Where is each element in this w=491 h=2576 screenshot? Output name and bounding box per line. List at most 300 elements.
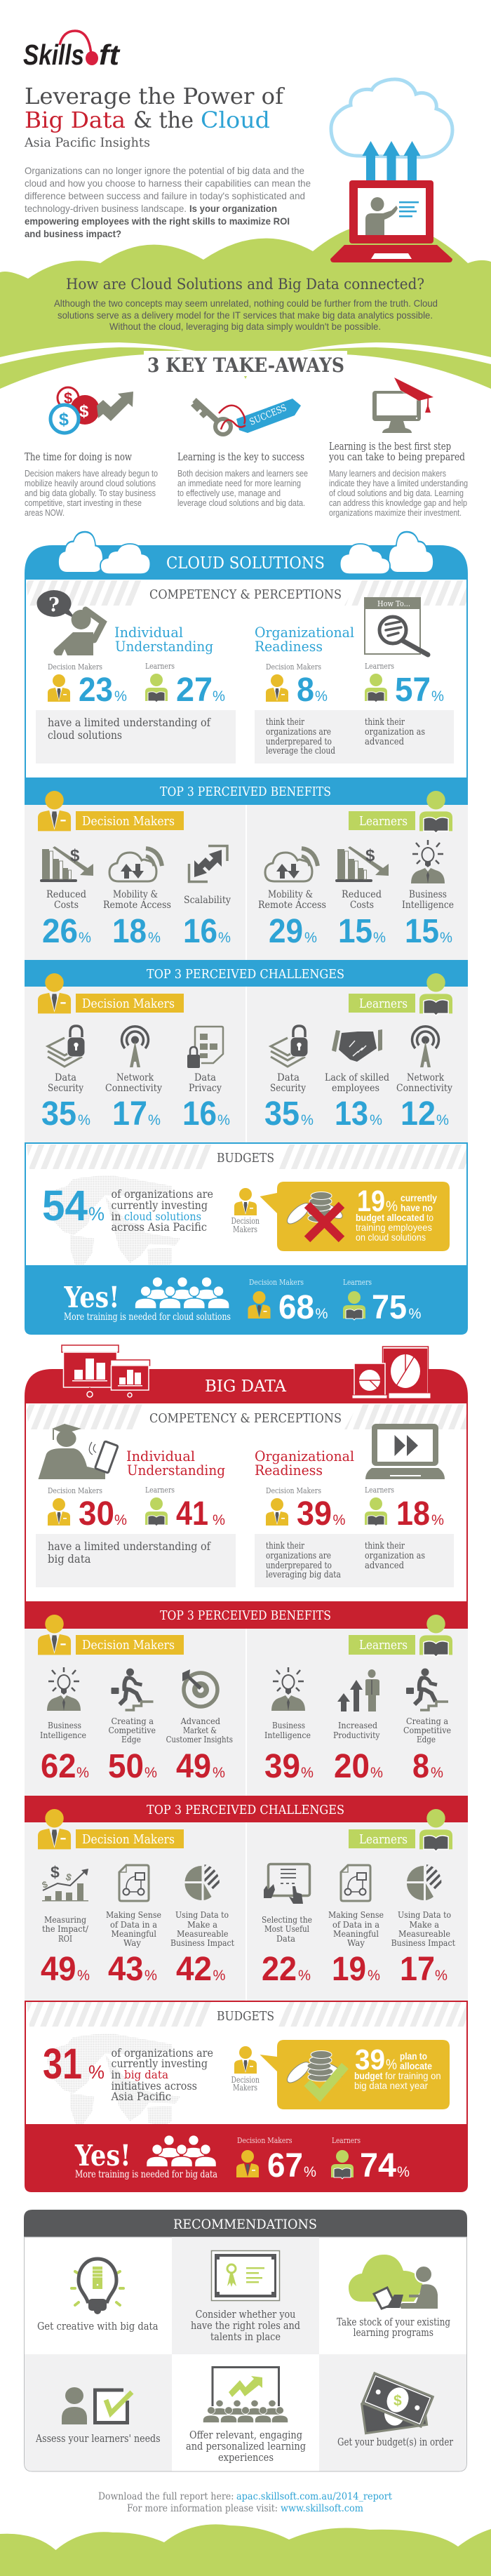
tag: learners [349, 973, 452, 1015]
title: Big Data [25, 107, 126, 133]
competency heading: COMPETENCY & PERCEPTIONS [149, 1411, 342, 1426]
stat: 31% investing: currently investing [111, 2057, 208, 2070]
stat: learners 41%: 41 [176, 1495, 208, 1533]
stat: 54% investing [42, 1182, 213, 1234]
takeaway 3: Many learners and decision makers [329, 469, 446, 479]
rec: personalized learning: and personalized learning [186, 2441, 306, 2452]
callout: organizational readiness: advanced [365, 737, 404, 747]
benefit: reduced costs 26% [40, 846, 93, 950]
callout: 19% no budget: % [386, 1199, 398, 1215]
intro text: empowering employees with the right skills to maximize ROI [25, 215, 290, 227]
section: cloud solutions [25, 532, 468, 1335]
stat: learners 75%: Learners [343, 1277, 372, 1287]
heading: organizational readiness [255, 1448, 354, 1479]
rec: existing programs: Take stock of your existing [337, 2317, 450, 2328]
stat: learners 75%: 75 [372, 1289, 407, 1326]
challenge: data security 35%: % [301, 1112, 314, 1128]
rec: get creative: Get creative with big data [37, 2321, 159, 2333]
rec: roles and talents [191, 2251, 300, 2343]
benefit: reduced costs 15%: 15 [338, 913, 372, 950]
heading: individual understanding: Individual [126, 1448, 195, 1464]
panel: budgets big data [25, 2001, 467, 2125]
icon: decision maker: Makers [233, 1224, 257, 1234]
panel: challenges [25, 1809, 468, 2001]
challenge: making sense of data 43% [106, 1865, 161, 1988]
title: Leverage the Power of [25, 83, 285, 109]
callout: 19% no budget: currently [401, 1192, 437, 1203]
challenge: data security 35%: Security [48, 1083, 83, 1094]
stat: decision makers 39%: % [332, 1512, 345, 1528]
heading: 3 key take-aways: 3 KEY TAKE-AWAYS [147, 354, 344, 377]
stat: decision makers 8%: Decision Makers [266, 662, 321, 672]
challenge: making sense of data 19%: 19 [332, 1951, 366, 1988]
takeaway 1: The time for doing is now [25, 452, 132, 463]
callout: 19% no budget: have no [401, 1202, 433, 1213]
benefit: competitive edge 50% [108, 1669, 157, 1785]
benefit: mobility 29%: 29 [269, 913, 303, 950]
icon: confused person [36, 590, 103, 655]
benefit: reduced costs 15%: Costs [350, 900, 374, 911]
challenge: network 12% [396, 1027, 452, 1133]
connected paragraph: Without the cloud, leveraging big data simply wouldn't be possible. [109, 321, 381, 332]
benefit: reduced costs 26%: % [79, 930, 91, 946]
challenge: selecting data 22%: Most Useful [264, 1923, 309, 1934]
section: big data [25, 1345, 468, 2192]
benefit: competitive edge 50%: Creating a [111, 1716, 154, 1726]
challenge: data privacy 16%: Privacy [189, 1083, 222, 1094]
benefit: business intelligence 39% [264, 1667, 314, 1785]
stat: decision makers 30%: 30 [79, 1495, 114, 1533]
benefit: scalability 16%: 16 [183, 913, 217, 950]
benefit: business intelligence 62%: % [76, 1765, 89, 1781]
challenge: selecting data 22%: 22 [262, 1951, 297, 1988]
recommendations header [24, 2210, 467, 2237]
icon: how-to magnifier [364, 597, 428, 655]
benefit: scalability 16%: Scalability [184, 895, 231, 906]
challenge: measurable impact 17%: 17 [400, 1951, 435, 1988]
challenge: data privacy 16%: 16 [182, 1095, 217, 1133]
callout: 39% plan to allocate: big data next year [354, 2080, 428, 2091]
callout: 39% plan to allocate: budget [354, 2070, 383, 2081]
stat: decision makers 23%: % [114, 688, 127, 705]
benefit: business intelligence 15%: Intelligence [402, 900, 454, 911]
callout: organizational readiness [255, 710, 454, 763]
recommendations header: RECOMMENDATIONS [173, 2217, 317, 2232]
callout: individual understanding: have a limited understanding of [48, 716, 211, 729]
benefit: increased productivity 20%: 20 [334, 1748, 370, 1785]
stat: 54% investing: of organizations are [111, 1188, 213, 1201]
callout: organizational readiness: leveraging big data [266, 1570, 341, 1580]
stat: 31% investing: Asia Pacific [111, 2090, 171, 2103]
band: top 3 challenges: TOP 3 PERCEIVED CHALLENGES [147, 1803, 344, 1817]
stat: 31% investing: initiatives across [111, 2080, 197, 2093]
footer links: www.skillsoft.com [281, 2503, 363, 2514]
benefit: business intelligence 39%: Intelligence [264, 1730, 311, 1740]
icon: bar chart boards [62, 1345, 150, 1397]
callout: 39% plan to allocate: plan to [400, 2050, 427, 2062]
callout: 19% no budget: on cloud solutions [356, 1232, 426, 1243]
takeaway 2 [177, 452, 308, 508]
subtitle: Asia Pacific Insights [24, 135, 150, 150]
takeaway 1: mobilize heavily around cloud solutions [25, 479, 156, 488]
callout: organizational readiness: advanced [365, 1561, 404, 1571]
challenge: data security 35%: 35 [264, 1095, 300, 1133]
takeaway 2: to effectively use, manage and [177, 488, 281, 498]
intro text: and business impact? [25, 228, 121, 239]
challenge: measurable impact 42%: Make a [187, 1919, 217, 1930]
callout: individual understanding: big data [48, 1553, 91, 1566]
challenge: making sense of data 19%: Meaningful [333, 1928, 379, 1939]
challenge: making sense of data 43%: Way [123, 1937, 142, 1948]
challenge: data security 35%: Security [270, 1083, 306, 1094]
benefit: reduced costs 26%: 26 [42, 913, 78, 950]
benefit: scalability 16% [183, 846, 231, 950]
budgets heading: BUDGETS [217, 1151, 274, 1166]
benefit: business intelligence 62%: 62 [41, 1748, 76, 1785]
heading: individual understanding: Understanding [115, 638, 213, 655]
callout: 39% plan to allocate: allocate [400, 2060, 432, 2071]
stat: decision makers 8%: 8 [297, 672, 314, 709]
tag: learners: Learners [359, 814, 408, 829]
takeaway 1: areas NOW. [25, 508, 65, 518]
panel: recommendations [24, 2210, 467, 2471]
challenge: data security 35%: Data [277, 1072, 300, 1083]
big data panel frame [25, 1403, 467, 1603]
heading: organizational readiness: Organizational [255, 1448, 354, 1464]
callout: 19% no budget: to [426, 1212, 433, 1223]
panel: budgets cloud [25, 1143, 467, 1267]
takeaway 3: you can take to being prepared [328, 452, 465, 463]
stat: 31% investing [43, 2040, 213, 2103]
challenge: lack of skilled employees 13%: employees [332, 1083, 379, 1094]
benefit: increased productivity 20%: Productivity [333, 1730, 380, 1740]
competency heading: COMPETENCY & PERCEPTIONS [149, 587, 342, 602]
tag: decision makers: Decision Makers [82, 814, 175, 829]
stat: learners 57%: 57 [395, 672, 431, 709]
benefit: increased productivity 20%: Increased [338, 1720, 377, 1730]
stat: learners 57% [365, 661, 444, 709]
tag: decision makers: Decision Makers [82, 1638, 175, 1653]
footer links: Download the full report here: [98, 2491, 234, 2502]
stat: learners 74%: Learners [332, 2135, 361, 2145]
stat: 54% investing: % [88, 1203, 105, 1224]
stat: 31% investing: 31 [43, 2040, 82, 2088]
benefit: market insights 49%: 49 [176, 1748, 211, 1785]
challenge: measuring impact 49%: the Impact/ [42, 1923, 89, 1934]
challenge: network 12%: Connectivity [396, 1083, 452, 1094]
takeaway 1: Decision makers have already begun to [25, 469, 158, 479]
benefit: reduced costs 26%: $ [70, 846, 80, 865]
rec: roles and talents: talents in place [210, 2332, 281, 2343]
takeaway 3 [328, 441, 468, 518]
benefit: reduced costs 15%: % [373, 930, 386, 946]
challenge: measurable impact 42%: Business Impact [170, 1937, 234, 1948]
callout: individual understanding [36, 1534, 236, 1587]
benefit: business intelligence 62%: Business [48, 1720, 81, 1730]
big data header: BIG DATA [205, 1377, 286, 1396]
icon: pie chart boards [352, 1347, 431, 1399]
rec: personalized learning: Offer relevant, engaging [189, 2430, 302, 2441]
intro text: technology-driven business landscape. [25, 203, 187, 214]
challenge: measuring impact 49% [41, 1863, 90, 1988]
stat: learners 18%: 18 [396, 1495, 430, 1533]
challenge: data security 35% [264, 1026, 314, 1133]
benefit: mobility 18%: Mobility & [113, 889, 158, 900]
callout: organizational readiness: think their [266, 1541, 305, 1551]
challenge: making sense of data 19%: Way [347, 1937, 365, 1948]
benefit: competitive edge 8%: Competitive [403, 1725, 451, 1735]
benefit: competitive edge 8%: % [431, 1765, 443, 1781]
dotted world map [47, 2034, 180, 2125]
icon: decision maker: Decision [231, 2075, 260, 2085]
callout: 19% no budget: budget allocated [356, 1212, 424, 1223]
takeaway 3: Learning is the best first step [329, 441, 451, 453]
callout: organizational readiness: underprepared to [266, 737, 332, 747]
benefit: competitive edge 50%: Edge [121, 1734, 141, 1744]
challenge: measurable impact 42%: Measureable [177, 1928, 229, 1939]
stat: 54% investing: 54 [42, 1182, 88, 1229]
tag: decision makers: Decision Makers [82, 1832, 175, 1847]
icon: decision maker [231, 2046, 260, 2093]
challenge: measurable impact 17%: Make a [410, 1919, 439, 1930]
benefit: scalability 16%: % [218, 930, 231, 946]
benefit: competitive edge 50%: % [144, 1765, 157, 1781]
icon: graduate with tablet [38, 1424, 118, 1479]
benefit: market insights 49%: Market & [183, 1725, 217, 1735]
stat: decision makers 39%: Decision Makers [266, 1486, 321, 1495]
challenge: measuring impact 49%: Measuring [44, 1914, 86, 1925]
takeaway 1 [25, 452, 158, 518]
icon: decision maker [231, 1188, 260, 1234]
challenge: making sense of data 43%: % [144, 1968, 157, 1984]
benefit: competitive edge 8%: Edge [417, 1734, 436, 1744]
challenge: selecting data 22% [262, 1864, 312, 1988]
stat: decision makers 68%: 68 [278, 1289, 314, 1326]
stat: decision makers 23%: Decision Makers [48, 662, 102, 672]
challenge: making sense of data 43%: 43 [108, 1951, 143, 1988]
challenge: measuring impact 49%: $ [65, 1871, 73, 1883]
rec: budget in order: Get your budget(s) in order [337, 2437, 453, 2448]
challenge: measurable impact 42% [170, 1861, 234, 1988]
callout: 39% plan to allocate: % [386, 2057, 397, 2073]
takeaway 2: an immediate need for more learning [177, 479, 301, 488]
benefit: reduced costs 26%: Costs [54, 900, 79, 911]
challenge: making sense of data 19%: Making Sense [328, 1909, 384, 1920]
icon: key with success tag: SUCCESS [248, 403, 288, 428]
stat: decision makers 8%: % [315, 688, 328, 705]
benefit: mobility 29%: Remote Access [258, 900, 326, 911]
callout: 19% no budget [260, 1182, 450, 1251]
tag: decision makers [38, 1809, 184, 1849]
benefit: business intelligence 62% [40, 1667, 89, 1785]
stat: 54% investing: across Asia Pacific [111, 1221, 207, 1234]
rec: existing programs: learning programs [354, 2328, 433, 2339]
benefit: competitive edge 8% [403, 1669, 451, 1785]
stat: learners 27% [145, 661, 225, 709]
stat: 31% investing: of organizations are [111, 2047, 213, 2060]
challenge: network 17% [105, 1027, 162, 1133]
challenge: selecting data 22%: Data [276, 1933, 295, 1944]
callout: individual understanding [36, 710, 236, 763]
heading: organizational readiness [255, 624, 354, 655]
challenge: network 17%: Connectivity [105, 1083, 162, 1094]
callout: 39% plan to allocate: for training on [385, 2070, 441, 2081]
icon: people group [135, 1277, 229, 1309]
benefit: mobility 18%: 18 [112, 913, 147, 950]
callout: organizational readiness: underprepared to [266, 1561, 332, 1571]
icon: coins and rising arrow: $ [79, 402, 89, 421]
dotted world map [47, 1175, 180, 1267]
stat: 31% investing: % [88, 2062, 105, 2083]
stat: 54% investing: currently investing [111, 1199, 208, 1212]
benefit: market insights 49%: Advanced [180, 1716, 220, 1726]
benefit: competitive edge 50%: 50 [108, 1748, 144, 1785]
challenge: network 12%: % [436, 1112, 449, 1128]
benefit: mobility 18%: Remote Access [103, 900, 171, 911]
heading: organizational readiness: Readiness [255, 1462, 323, 1479]
takeaway 3: of cloud solutions and big data. Learning [329, 488, 464, 498]
benefit: competitive edge 50%: Competitive [108, 1725, 156, 1735]
tag: learners: Learners [359, 1832, 408, 1847]
rec: budget in order: $ [394, 2393, 402, 2409]
challenge: data privacy 16%: % [217, 1112, 230, 1128]
takeaway 3: organizations maximize their investment. [329, 508, 462, 518]
heading: organizational readiness: Organizational [255, 624, 354, 641]
stat: learners 41%: % [213, 1512, 225, 1528]
stat: 54% investing: cloud solutions [124, 1210, 201, 1223]
challenge: data security 35% [41, 1026, 90, 1133]
benefit: business intelligence 62%: Intelligence [40, 1730, 86, 1740]
benefit: business intelligence 15%: % [440, 930, 452, 946]
logo: Skillsoft: Skills [23, 39, 84, 71]
callout: organizational readiness: think their [266, 717, 305, 728]
band: top 3 benefits: TOP 3 PERCEIVED BENEFITS [160, 1608, 331, 1623]
heading: how connected: How are Cloud Solutions and Big Data connected? [66, 276, 424, 293]
stat: learners 74%: 74 [360, 2147, 396, 2184]
benefit: competitive edge 8%: 8 [412, 1748, 429, 1785]
rec: roles and talents: Consider whether you [196, 2309, 295, 2321]
stat: decision makers 39%: 39 [297, 1495, 332, 1533]
tag: decision makers [38, 973, 184, 1013]
callout: individual understanding: have a limited understanding of [48, 1540, 211, 1553]
challenge: data privacy 16%: Data [194, 1072, 216, 1083]
rec: personalized learning [186, 2368, 306, 2464]
title: Cloud [201, 107, 270, 133]
stat: decision makers 68%: Decision Makers [249, 1277, 304, 1287]
challenge: making sense of data 43%: of Data in a [110, 1919, 157, 1930]
footer links: apac.skillsoft.com.au/2014_report [236, 2491, 393, 2502]
heading: individual understanding [114, 624, 213, 655]
stat: learners 75% [343, 1277, 421, 1326]
band: top 3 challenges [25, 960, 468, 987]
panel: more training big data: More training is needed for big data [75, 2169, 217, 2180]
challenge: network 17%: % [148, 1112, 161, 1128]
rec: existing programs [337, 2255, 450, 2339]
benefit: business intelligence 39%: % [301, 1765, 314, 1781]
intro text [25, 165, 311, 239]
cloud solutions panel frame [25, 579, 467, 779]
benefit: business intelligence 15% [402, 840, 454, 950]
stat: decision makers 68% [248, 1277, 328, 1326]
heading: individual understanding: Individual [114, 624, 183, 641]
challenge: measurable impact 42%: % [213, 1968, 226, 1984]
challenge: data security 35%: % [78, 1112, 90, 1128]
challenge: measuring impact 49%: ROI [58, 1933, 72, 1944]
rec: assess needs [35, 2387, 161, 2445]
stat: decision makers 30% [48, 1486, 127, 1533]
callout: organizational readiness: organization as [365, 1551, 425, 1561]
title [25, 83, 285, 133]
benefit: increased productivity 20% [333, 1669, 383, 1785]
benefit: market insights 49%: % [213, 1765, 225, 1781]
footer green hills [0, 2524, 491, 2576]
icon: monitor with graduation cap [372, 378, 433, 433]
benefit: increased productivity 20%: % [370, 1765, 383, 1781]
rec: roles and talents: have the right roles and [191, 2321, 300, 2332]
stat: decision makers 30%: % [114, 1512, 127, 1528]
tag: learners [349, 1615, 452, 1657]
tag: decision makers [38, 1615, 184, 1655]
rec: personalized learning: experiences [218, 2452, 274, 2464]
footer links: For more information please visit: [127, 2503, 278, 2514]
tag: decision makers [38, 791, 184, 831]
challenge: selecting data 22%: Selecting the [262, 1914, 312, 1925]
icon: decision maker: Decision [231, 1216, 260, 1226]
callout: 19% no budget: training employees [356, 1222, 432, 1233]
challenge: network 12%: 12 [401, 1095, 436, 1133]
stat: decision makers 23% [48, 662, 127, 709]
takeaway 2: leverage cloud solutions and big data. [177, 498, 305, 508]
benefit: market insights 49%: Customer Insights [166, 1734, 233, 1744]
icon: laptop with presenter [330, 180, 452, 262]
stat: decision makers 23%: 23 [79, 672, 113, 709]
takeaway 2: Both decision makers and learners see [177, 469, 308, 479]
tag: learners: Learners [359, 1638, 408, 1653]
challenge: measuring impact 49%: % [77, 1968, 90, 1984]
stat: decision makers 67%: % [304, 2164, 316, 2180]
icon: people group [146, 2135, 216, 2167]
stat: learners 18% [365, 1485, 444, 1533]
band: top 3 benefits: TOP 3 PERCEIVED BENEFITS [160, 785, 331, 799]
stat: 31% investing: big data [124, 2069, 168, 2081]
takeaway 2: Learning is the key to success [177, 452, 304, 463]
takeaway 1: and big data globally. To stay business [25, 488, 156, 498]
budgets heading: BUDGETS [217, 2009, 274, 2024]
heading: organizational readiness: Readiness [255, 638, 323, 655]
takeaway 3: indicate they have a limited understanding [329, 479, 468, 488]
benefit: competitive edge 8%: Creating a [406, 1716, 448, 1726]
challenge: measurable impact 17%: Business Impact [391, 1937, 455, 1948]
callout: 39% plan to allocate: 39 [355, 2043, 385, 2076]
rec: budget in order [337, 2373, 453, 2448]
benefit: mobility 29% [258, 848, 326, 950]
rec: get creative [37, 2259, 159, 2333]
challenge: measurable impact 17%: Measureable [398, 1928, 450, 1939]
cloud solutions header [25, 532, 468, 579]
connected paragraph: Although the two concepts may seem unrelated, nothing could be further from the truth. Cloud [54, 298, 438, 309]
connected paragraph: solutions serve as a delivery model for the IT services that make big data analytics possible. [58, 309, 433, 321]
tag: learners [349, 791, 452, 833]
intro text: cloud and how you choose to harness their capabilities can mean the [25, 178, 311, 189]
connected paragraph [54, 298, 438, 332]
challenge: making sense of data 19%: % [368, 1968, 380, 1984]
stat: learners 41% [145, 1485, 225, 1533]
panel: more training cloud [25, 1265, 468, 1335]
benefit: reduced costs 15% [335, 846, 389, 950]
title: & the [133, 107, 194, 133]
icon: decision maker: Makers [233, 2083, 257, 2093]
callout: organizational readiness: organizations are [266, 727, 331, 738]
